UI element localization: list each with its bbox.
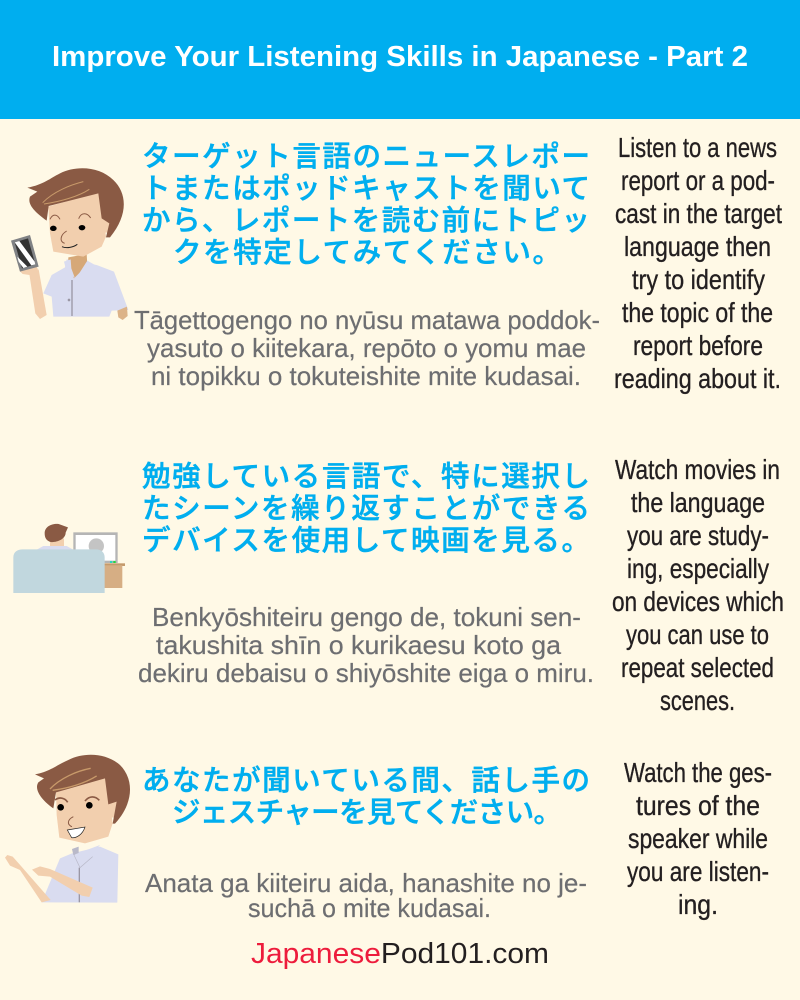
panel: section 1 romaji text: Tāgettogengo no nyūsu matawa poddok- — [134, 305, 600, 335]
panel: section 2 English text — [612, 454, 784, 716]
panel: section 1 English text — [614, 132, 782, 394]
logo: JapanesePod101.com: JapanesePod101.com — [251, 938, 549, 970]
panel: section 3 English text — [624, 757, 772, 920]
panel: section 1 Japanese text: ターゲット言語のニュースレポー — [142, 141, 590, 173]
panel: section 3 English text: you are listen- — [627, 856, 769, 887]
panel: section 2 romaji text — [138, 602, 594, 688]
panel: section 1 romaji text: yasuto o kiitekara, repōto o yomu mae — [147, 333, 586, 363]
panel: section 1 Japanese text — [142, 141, 590, 269]
panel: section 1 English text: report before — [633, 330, 763, 361]
panel: section 1 Japanese text: トまたはポッドキャストを聞いて — [142, 173, 590, 205]
panel: section 1 English text: language then — [624, 231, 771, 262]
panel: section 1 Japanese text: から、レポートを読む前にトピッ — [142, 205, 590, 237]
panel: section 3 romaji text: suchā o mite kudasai. — [248, 893, 491, 923]
panel: section 3 romaji text: Anata ga kiiteiru aida, hanashite no je- — [145, 868, 587, 898]
panel: section 3 Japanese text: あなたが聞いている間、話し手の — [142, 765, 590, 797]
icon: man on couch watching TV — [13, 524, 125, 593]
icon: man gesturing while talking — [5, 755, 130, 903]
panel: section 1 romaji text: ni topikku o tokuteishite mite kudasai. — [151, 361, 581, 391]
panel: section 1 Japanese text: クを特定してみてください。 — [173, 237, 561, 269]
panel: section 1 English text: try to identify — [632, 264, 765, 295]
panel: section 2 Japanese text: 勉強している言語で、特に選択し — [142, 461, 590, 493]
panel: section 2 English text: you are study- — [627, 520, 769, 551]
panel: section 2 Japanese text: デバイスを使用して映画を見る。 — [142, 525, 590, 557]
panel: section 2 English text: the language — [631, 487, 765, 518]
icon: man holding phone — [11, 168, 128, 320]
panel: section 2 Japanese text: たシーンを繰り返すことができる — [142, 493, 590, 525]
panel: section 2 romaji text: dekiru debaisu o shiyōshite eiga o miru. — [138, 658, 594, 688]
panel: section 2 Japanese text — [142, 461, 590, 557]
panel: section 2 English text: ing, especially — [627, 553, 769, 584]
panel: section 3 Japanese text — [142, 765, 590, 829]
panel: section 3 romaji text — [145, 868, 587, 923]
panel: section 2 romaji text: takushita shīn o kurikaesu koto ga — [156, 630, 562, 660]
header banner — [0, 0, 800, 119]
panel: section 3 Japanese text: ジェスチャーを見てください。 — [172, 797, 562, 829]
title: Improve Your Listening Skills in Japanese - Part 2 — [52, 41, 748, 73]
panel: section 2 romaji text: Benkyōshiteiru gengo de, tokuni sen- — [152, 602, 581, 632]
panel: section 3 English text: tures of the — [636, 790, 760, 821]
panel: section 3 English text: speaker while — [628, 823, 768, 854]
panel: section 1 romaji text — [134, 305, 600, 391]
panel: section 2 English text: scenes. — [660, 685, 735, 716]
panel: section 3 English text: ing. — [678, 889, 718, 920]
